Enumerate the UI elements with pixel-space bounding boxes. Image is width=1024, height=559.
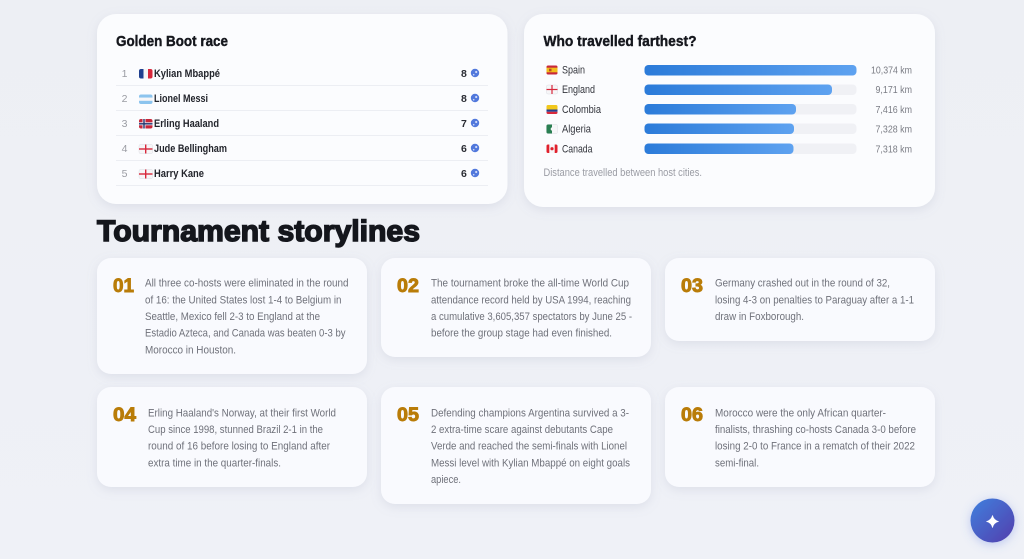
story text 05 xyxy=(431,408,630,486)
number 05: 05 xyxy=(397,405,419,426)
heading: Tournament storylines: Tournament storylines xyxy=(97,215,420,248)
story text 01: Morocco in Houston. xyxy=(145,344,236,356)
bar row: Spain xyxy=(546,64,912,76)
story text 04: Erling Haaland's Norway, at their first World xyxy=(148,408,336,420)
row 2: Lionel Messi: Lionel Messi xyxy=(154,93,208,105)
story card 02 xyxy=(381,258,651,357)
panel: Who travelled farthest xyxy=(524,14,935,207)
bar row: England: England xyxy=(562,84,595,96)
heading: Golden Boot race: Golden Boot race xyxy=(116,34,228,50)
story text 05: Messi level with Kylian Mbappé on eight goals xyxy=(431,458,630,470)
story text 02: attendance record held by USA 1994, reaching xyxy=(431,294,631,306)
story text 01 xyxy=(145,278,348,356)
story text 01: of 16: the United States lost 1-4 to Belgium in xyxy=(145,294,342,306)
story text 04: Cup since 1998, stunned Brazil 2-1 in the xyxy=(148,424,323,436)
number 06: 06 xyxy=(681,405,703,426)
bar row: Algeria: Algeria xyxy=(562,124,592,136)
panel: Golden Boot race xyxy=(97,14,508,204)
story text 06: losing 2-0 to France in a rematch of their 2022 xyxy=(715,440,915,452)
row 2: Lionel Messi: 8 xyxy=(461,93,467,105)
bar row: Colombia: 7,416 km xyxy=(876,104,912,116)
story text 06: Morocco were the only African quarter- xyxy=(715,408,886,420)
story card 03 xyxy=(665,258,935,341)
story text 01: All three co-hosts were eliminated in the round xyxy=(145,278,348,290)
story card 04 xyxy=(97,387,367,487)
story text 03: draw in Foxborough. xyxy=(715,311,804,323)
heading: Who travelled farthest: Who travelled farthest? xyxy=(544,34,697,50)
story text 04 xyxy=(148,408,336,470)
number 02: 02 xyxy=(397,276,419,297)
row 3: Erling Haaland xyxy=(116,118,488,136)
row 4: Jude Bellingham: Jude Bellingham xyxy=(154,143,227,155)
story text 05: Verde and reached the semi-finals with Lionel xyxy=(431,440,627,452)
story text 01: Estadio Azteca, and Canada was beaten 0-3 by xyxy=(145,328,346,340)
story card 05 xyxy=(381,387,651,504)
row 5: Harry Kane: 6 xyxy=(461,168,467,180)
story text 06 xyxy=(715,408,916,470)
story text 03: Germany crashed out in the round of 32, xyxy=(715,278,890,290)
bar row: Colombia xyxy=(546,104,912,114)
bar row: England xyxy=(546,84,912,96)
number 04: 04 xyxy=(113,405,136,426)
row 2: Lionel Messi: 2 xyxy=(122,93,128,105)
story text 03: losing 4-3 on penalties to Paraguay after a 1-1 xyxy=(715,294,914,306)
bar row: England: 9,171 km xyxy=(876,84,912,96)
story text 04: extra time in the quarter-finals. xyxy=(148,458,281,470)
number 03: 03 xyxy=(681,276,703,297)
story text 02: a cumulative 3,605,357 spectators by June 25 - xyxy=(431,311,632,323)
chart note: Distance travelled between host cities. xyxy=(544,167,702,179)
story text 06: semi-final. xyxy=(715,458,759,470)
story text 02 xyxy=(431,278,632,340)
row 5: Harry Kane: 5 xyxy=(122,168,128,180)
bar row: Canada: 7,318 km xyxy=(876,144,912,156)
row 4: Jude Bellingham: 6 xyxy=(461,143,467,155)
row 2: Lionel Messi xyxy=(116,93,488,110)
row 3: Erling Haaland: 3 xyxy=(122,118,128,130)
row 4: Jude Bellingham xyxy=(116,143,488,160)
bar row: Spain: Spain xyxy=(562,64,585,76)
bar row: Algeria: 7,328 km xyxy=(876,124,912,136)
story text 05: apiece. xyxy=(431,474,461,486)
story text 05: 2 extra-time scare against debutants Cape xyxy=(431,424,613,436)
row 5: Harry Kane xyxy=(116,168,488,186)
bar row: Colombia: Colombia xyxy=(562,104,602,116)
story text 03 xyxy=(715,278,914,323)
bar row: Canada xyxy=(546,144,912,154)
row 1: Kylian Mbappé xyxy=(116,68,488,86)
story card 06 xyxy=(665,387,935,487)
story card 01 xyxy=(97,258,367,374)
row 5: Harry Kane: Harry Kane xyxy=(154,168,204,180)
story text 06: finalists, thrashing co-hosts Canada 3-0 before xyxy=(715,424,916,436)
bar row: Algeria xyxy=(546,124,912,136)
number 01: 01 xyxy=(113,276,134,297)
story text 01: Seattle, Mexico fell 2-3 to England at the xyxy=(145,311,320,323)
icon: assistant sparkle button xyxy=(970,498,1014,542)
story text 05: Defending champions Argentina survived a 3- xyxy=(431,408,629,420)
bar row: Canada: Canada xyxy=(562,144,593,156)
story text 02: The tournament broke the all-time World Cup xyxy=(431,278,629,290)
row 3: Erling Haaland: 7 xyxy=(461,118,467,130)
row 4: Jude Bellingham: 4 xyxy=(122,143,128,155)
row 3: Erling Haaland: Erling Haaland xyxy=(154,118,219,130)
story text 04: round of 16 before losing to England after xyxy=(148,440,330,452)
row 1: Kylian Mbappé: 8 xyxy=(461,68,467,80)
row 1: Kylian Mbappé: 1 xyxy=(122,68,128,80)
row 1: Kylian Mbappé: Kylian Mbappé xyxy=(154,68,220,80)
story text 02: before the group stage had even finished. xyxy=(431,328,612,340)
bar row: Spain: 10,374 km xyxy=(871,64,912,76)
